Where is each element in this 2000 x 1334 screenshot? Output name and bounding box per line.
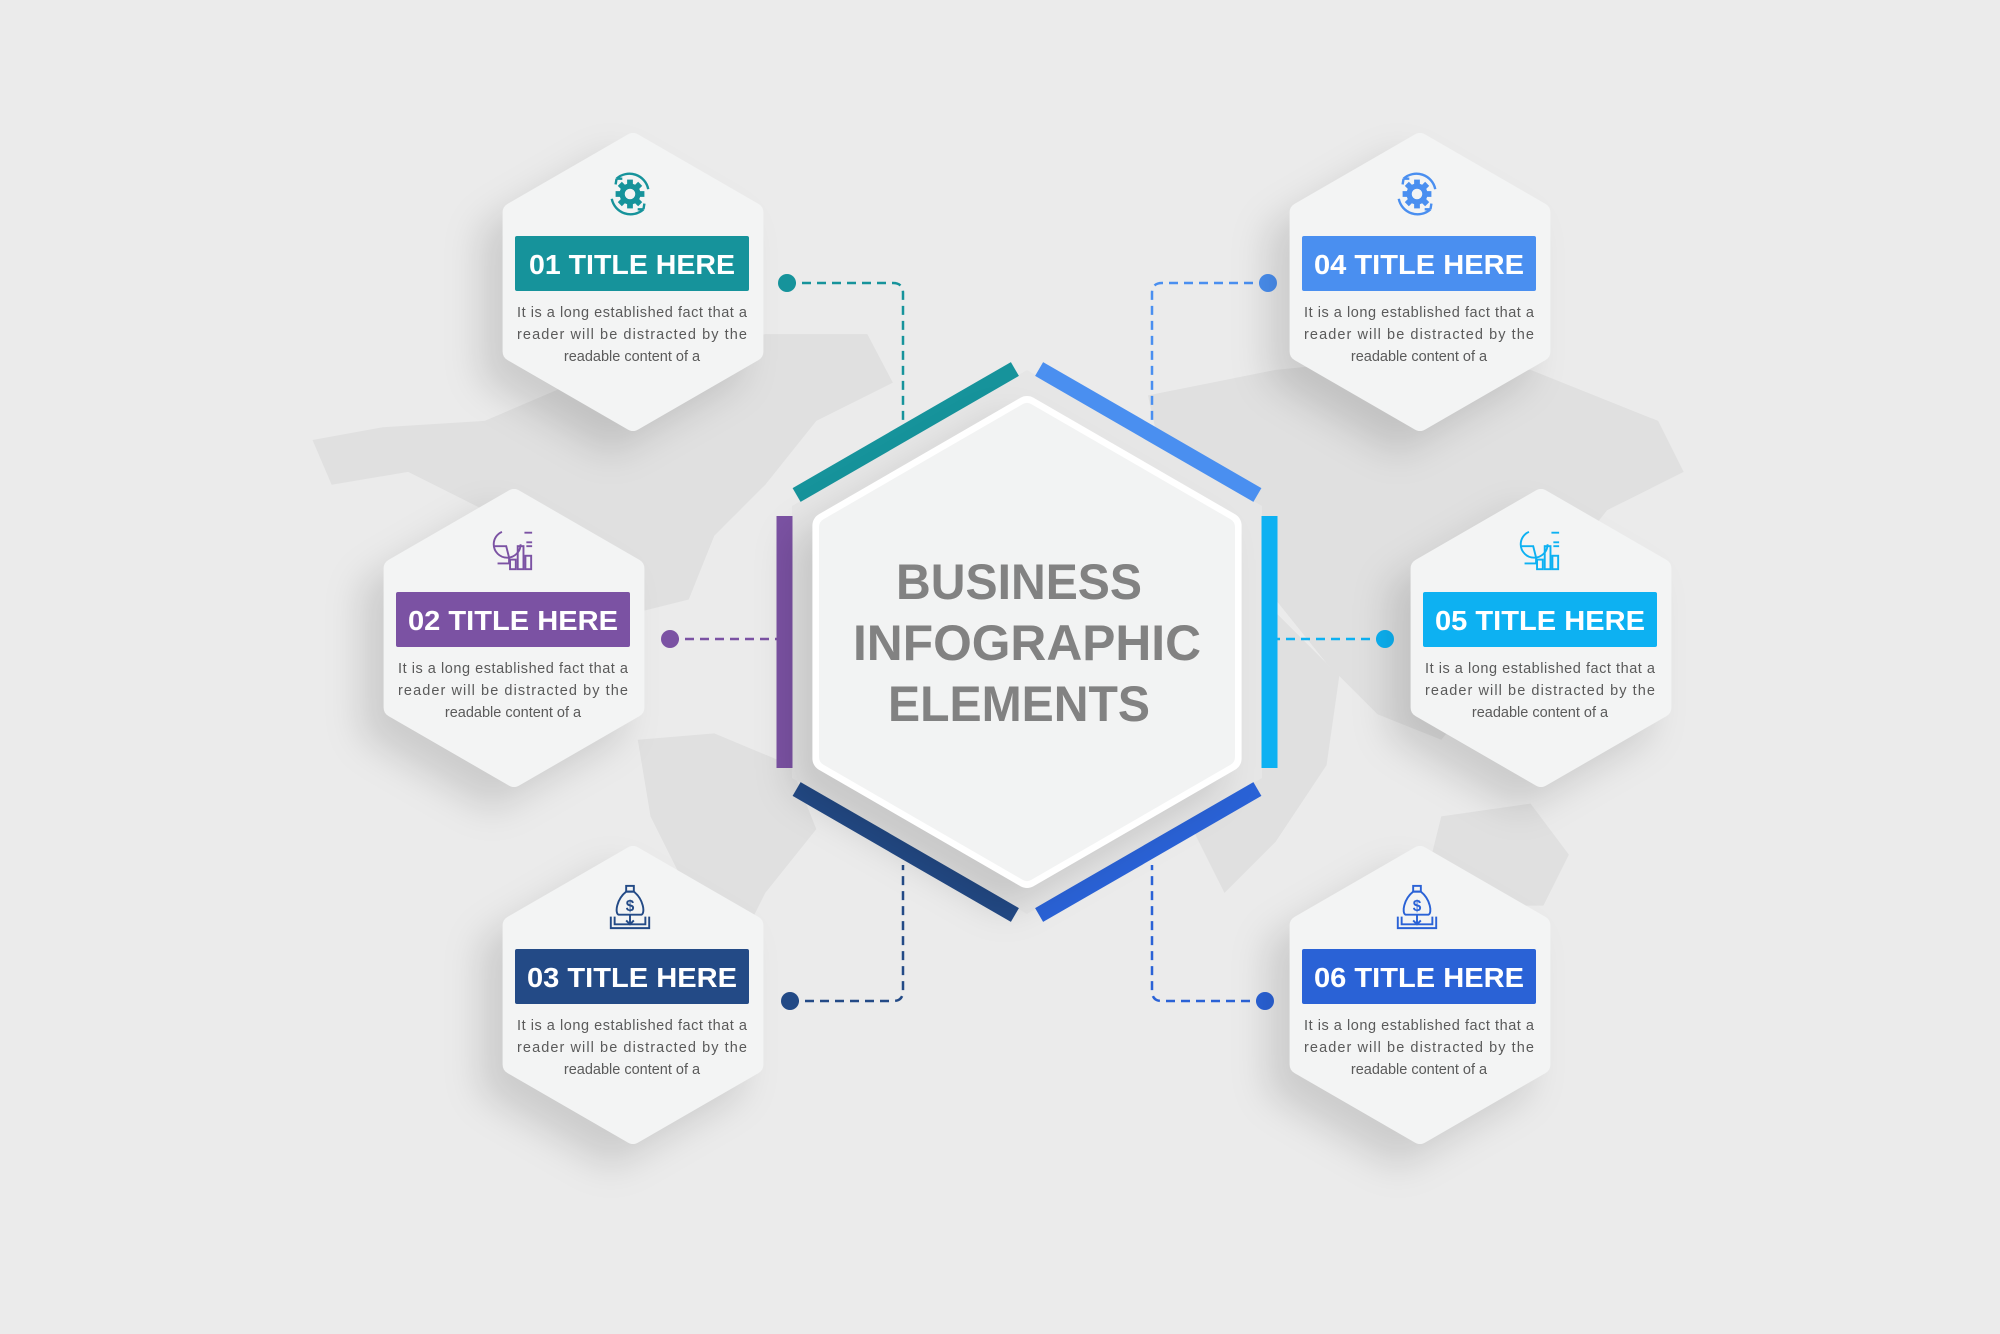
text 06 xyxy=(1304,1018,1535,1078)
icon: money bag xyxy=(611,886,649,928)
card 01 xyxy=(513,143,753,421)
title 02 xyxy=(396,592,630,647)
title 05: 05 TITLE HERE xyxy=(1435,605,1645,636)
title 03 xyxy=(515,949,749,1004)
title 01 xyxy=(515,236,749,291)
center title: ELEMENTS xyxy=(888,676,1150,732)
text 06: reader will be distracted by the xyxy=(1304,1040,1534,1056)
card 02 xyxy=(394,499,634,777)
text 06: It is a long established fact that a xyxy=(1304,1018,1535,1034)
band segments xyxy=(784,369,1270,915)
title 05 xyxy=(1423,592,1657,647)
card 05 xyxy=(1421,499,1661,777)
world map background xyxy=(312,334,1684,969)
text 02: It is a long established fact that a xyxy=(398,661,629,677)
center title: BUSINESS xyxy=(896,554,1142,610)
text 01: readable content of a xyxy=(564,349,701,365)
text 01 xyxy=(517,305,748,365)
icon: money bag xyxy=(1398,886,1436,928)
text 05: reader will be distracted by the xyxy=(1425,683,1655,699)
icon: gear xyxy=(1399,174,1435,214)
card 03 xyxy=(513,856,753,1134)
icon: chart xyxy=(494,531,532,569)
text 04: It is a long established fact that a xyxy=(1304,305,1535,321)
text 02 xyxy=(398,661,629,721)
title 04 xyxy=(1302,236,1536,291)
text 05 xyxy=(1425,661,1656,721)
text 02: reader will be distracted by the xyxy=(398,683,628,699)
title 06 xyxy=(1302,949,1536,1004)
center title xyxy=(853,554,1201,732)
title 01: 01 TITLE HERE xyxy=(529,249,735,280)
text 05: It is a long established fact that a xyxy=(1425,661,1656,677)
text 03: It is a long established fact that a xyxy=(517,1018,748,1034)
card 04 xyxy=(1300,143,1540,421)
text 03: readable content of a xyxy=(564,1062,701,1078)
center hexagon xyxy=(784,369,1270,915)
title 04: 04 TITLE HERE xyxy=(1314,249,1524,280)
text 03: reader will be distracted by the xyxy=(517,1040,747,1056)
text 04: reader will be distracted by the xyxy=(1304,327,1534,343)
connector dots xyxy=(661,274,1394,1010)
icon: gear xyxy=(612,174,648,214)
title 06: 06 TITLE HERE xyxy=(1314,962,1524,993)
title 03: 03 TITLE HERE xyxy=(527,962,737,993)
text 01: reader will be distracted by the xyxy=(517,327,747,343)
icon: chart xyxy=(1521,531,1559,569)
text 04: readable content of a xyxy=(1351,349,1488,365)
connectors xyxy=(670,283,1385,1001)
text 05: readable content of a xyxy=(1472,705,1609,721)
card 06 xyxy=(1300,856,1540,1134)
text 06: readable content of a xyxy=(1351,1062,1488,1078)
center title: INFOGRAPHIC xyxy=(853,615,1201,671)
title 02: 02 TITLE HERE xyxy=(408,605,618,636)
text 01: It is a long established fact that a xyxy=(517,305,748,321)
text 03 xyxy=(517,1018,748,1078)
text 04 xyxy=(1304,305,1535,365)
text 02: readable content of a xyxy=(445,705,582,721)
